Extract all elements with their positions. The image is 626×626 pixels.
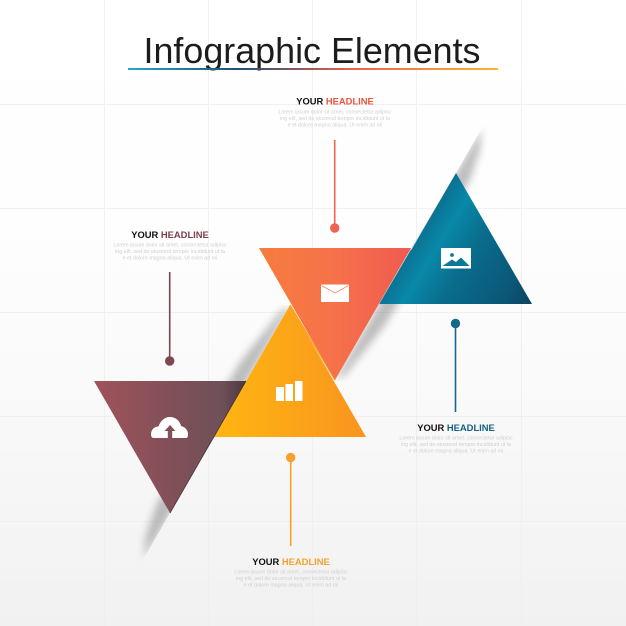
callout: teal headline: e et dolore magna aliqua. Ut enim ad mi [409,448,503,454]
callout: maroon headline [113,229,227,262]
callout: yellow headline: Lorem ipsum dolor sit amet, consectetur adipisc [234,570,348,576]
callout: red headline: Lorem ipsum dolor sit amet, consectetur adipisc [278,110,392,116]
callout: teal headline: ing elit, sed do eiusmod tempor incididunt ut la [401,442,511,448]
icon: cloud upload [151,417,188,438]
title underline [128,68,498,70]
callout: teal headline: YOUR HEADLINE [417,422,495,433]
title: Infographic Elements [144,30,480,71]
connector: yellow [286,453,295,546]
icon: bar chart [276,381,302,401]
connector: maroon [165,272,174,366]
callout: red headline: YOUR HEADLINE [296,96,374,106]
callout: maroon headline: YOUR HEADLINE [131,229,209,240]
triangle: maroon with cloud icon [94,381,246,513]
callout: maroon headline: ing elit, sed do eiusmod tempor incididunt ut la [115,249,225,255]
triangle: red-orange with envelope icon [259,248,411,380]
callout: maroon headline: Lorem ipsum dolor sit amet, consectetur adipisc [113,242,227,248]
triangle: teal with image icon [380,173,532,304]
shadow: upper diagonal [335,128,482,380]
callout: red headline [278,96,392,128]
callout: yellow headline: e et dolore magna aliqua. Ut enim ad mi [244,582,338,588]
callout: red headline: e et dolore magna aliqua. Ut enim ad mi [288,122,382,128]
callout: maroon headline: e et dolore magna aliqua. Ut enim ad mi [123,256,217,262]
connector: teal [451,319,460,412]
callout: yellow headline: YOUR HEADLINE [252,556,330,567]
connector: red [330,140,339,233]
shadow: lower diagonal [144,306,291,558]
callout: yellow headline: ing elit, sed do eiusmod tempor incididunt ut la [236,576,346,582]
icon: envelope [321,284,349,302]
triangle: yellow with bar chart icon [214,305,366,437]
callout: teal headline [399,422,513,454]
callout: red headline: ing elit, sed do eiusmod tempor incididunt ut la [280,116,390,122]
callout: teal headline: Lorem ipsum dolor sit amet, consectetur adipisc [399,436,513,442]
callout: yellow headline [234,556,348,588]
icon: image [441,248,471,268]
